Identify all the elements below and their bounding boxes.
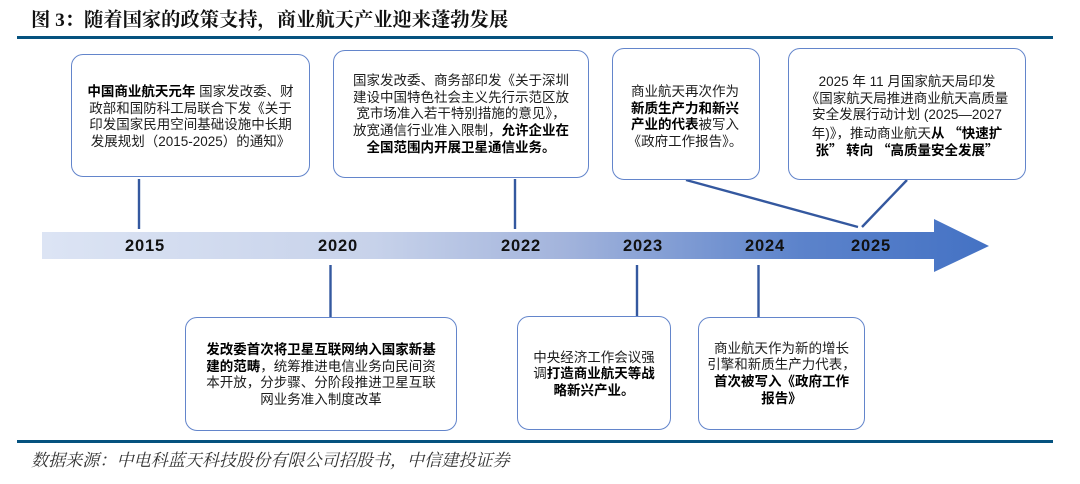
panel: 2023 <box>517 316 671 430</box>
text: 2023: 调打造商业航天等战 <box>533 366 655 381</box>
text: 2024 report: 《政府工作报告》。 <box>628 134 742 149</box>
title: 图 3：随着国家的政策支持，商业航天产业迎来蓬勃发展 <box>31 10 508 31</box>
text: 2022: 全国范围内开展卫星通信业务。 <box>366 140 556 155</box>
year labels <box>125 237 891 255</box>
text: 2015 <box>87 84 294 149</box>
text: 2024 report: 产业的代表被写入 <box>631 117 739 132</box>
text: 2022: 宽市场准入若干特别措施的意见》， <box>356 106 566 121</box>
connectors <box>139 179 907 317</box>
text: 2020: 网业务准入制度改革 <box>260 392 382 407</box>
text: 2023: 略新兴产业。 <box>554 383 634 398</box>
text: 2025: 《国家航天局推进商业航天高质量 <box>806 91 1008 106</box>
panel: 2024 report <box>612 48 760 180</box>
text: 2025: 年)》，推动商业航天从 “快速扩 <box>812 122 1002 142</box>
text: 2024: 商业航天作为新的增长 <box>714 340 849 356</box>
text: 2023: 中央经济工作会议强 <box>533 350 655 364</box>
bottom rule <box>17 440 1053 442</box>
source note: 数据来源：中电科蓝天科技股份有限公司招股书，中信建投证券 <box>31 451 510 470</box>
text: 2022 <box>353 73 569 155</box>
panel: 2015 <box>71 54 310 177</box>
panel: 2025 <box>788 48 1026 180</box>
text: 2025 <box>806 74 1008 159</box>
text: 2015: 印发国家民用空间基础设施中长期 <box>89 117 292 132</box>
text: 2024 report <box>628 84 742 149</box>
text: 2020 <box>206 342 436 407</box>
text: 2024 <box>707 340 856 406</box>
text: 2024: 报告》 <box>761 391 802 406</box>
text: 2024 report: 商业航天再次作为 <box>631 84 739 99</box>
text: 2020: 本开放，分步骤、分阶段推进卫星互联 <box>206 375 436 390</box>
text: 2025: 2025 年 11 月国家航天局印发 <box>819 74 995 89</box>
year labels: 2015 <box>125 237 165 255</box>
text: 2022: 国家发改委、商务部印发《关于深圳 <box>353 73 569 88</box>
text: 2022: 放宽通信行业准入限制，允许企业在 <box>353 123 569 138</box>
top rule <box>17 36 1053 39</box>
year labels: 2024 <box>745 237 785 255</box>
text: 2015: 发展规划（2015-2025）的通知》 <box>91 134 290 149</box>
timeline arrow <box>42 219 989 272</box>
text: 2020: 发改委首次将卫星互联网纳入国家新基 <box>206 342 436 357</box>
panel: 2024 <box>698 317 865 430</box>
year labels: 2020 <box>318 237 358 255</box>
text: 2024 report: 新质生产力和新兴 <box>631 101 739 116</box>
panel: 2020 <box>185 317 457 431</box>
text: 2025: 张” 转向 “高质量安全发展” <box>815 139 998 159</box>
text: 2025: 安全发展行动计划 (2025—2027 <box>812 107 1002 122</box>
text: 2024: 引擎和新质生产力代表， <box>707 357 856 372</box>
text: 2022: 建设中国特色社会主义先行示范区放 <box>353 90 569 105</box>
year labels: 2022 <box>501 237 541 255</box>
text: 2015: 政部和国防科工局联合下发《关于 <box>89 101 292 116</box>
panel: 2022 <box>333 50 589 178</box>
year labels: 2025 <box>851 237 891 255</box>
text: 2015: 中国商业航天元年 国家发改委、财 <box>87 84 294 99</box>
text: 2020: 建的范畴，统筹推进电信业务向民间资 <box>206 359 436 374</box>
text: 2024: 首次被写入《政府工作 <box>714 374 849 389</box>
text: 2023 <box>533 350 655 398</box>
year labels: 2023 <box>623 237 663 255</box>
